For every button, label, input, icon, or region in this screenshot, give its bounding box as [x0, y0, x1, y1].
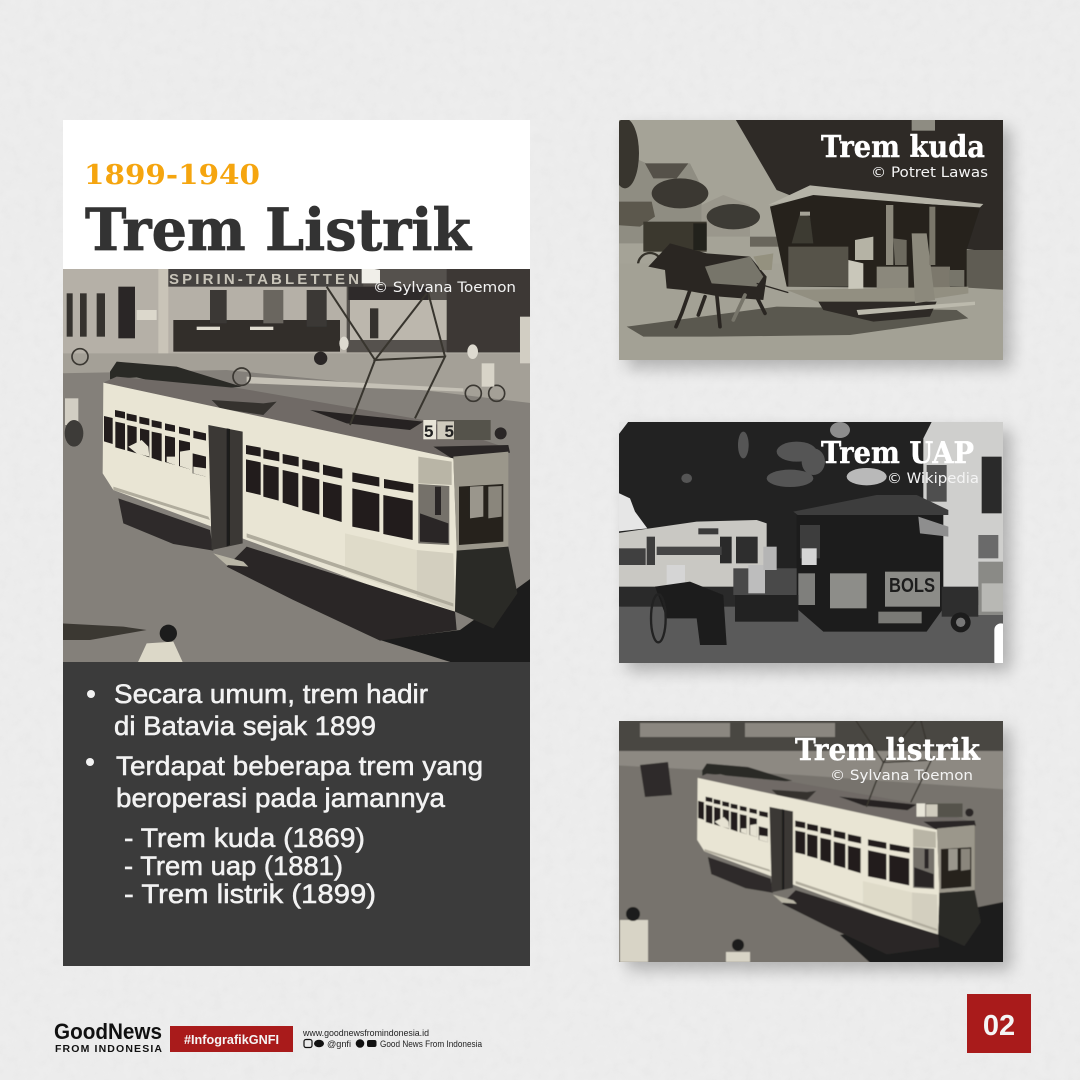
footer links: Good News From Indonesia — [380, 1039, 483, 1050]
caption: Trem kuda: Trem kuda — [821, 130, 985, 165]
icon: youtube — [367, 1040, 376, 1047]
tram type list: - Trem kuda (1869) — [124, 823, 365, 853]
year range: 1899-1940 — [84, 160, 260, 191]
photo card: steam tram — [616, 419, 1011, 671]
credit: © Wikipedia — [887, 471, 979, 487]
credit: © Sylvana Toemon — [830, 768, 973, 784]
route number: 5 5 — [424, 422, 454, 441]
icon: instagram — [304, 1040, 312, 1048]
bullet 1: di Batavia sejak 1899 — [114, 711, 376, 741]
footer logo: GoodNews: FROM INDONESIA — [55, 1043, 162, 1055]
bullet 1: Secara umum, trem hadir — [114, 679, 428, 709]
hashtag badge — [170, 1026, 293, 1052]
footer links: @gnfi — [327, 1039, 351, 1050]
tram type list: - Trem listrik (1899) — [124, 879, 376, 909]
bullet 2: Terdapat beberapa trem yang — [116, 751, 483, 781]
bullet 1 — [87, 679, 428, 741]
main photo: electric tram — [60, 266, 533, 666]
credit: © Potret Lawas — [871, 165, 988, 181]
footer logo: GoodNews — [54, 1019, 162, 1055]
footer logo: GoodNews: GoodNews — [54, 1019, 162, 1044]
photo credit: © Sylvana Toemon — [373, 280, 516, 296]
bullet 2 — [86, 751, 483, 813]
panel: title card — [63, 120, 530, 270]
icon: twitter — [314, 1040, 324, 1047]
tram type list: - Trem uap (1881) — [124, 851, 343, 881]
hashtag badge: #InfografikGNFI — [184, 1032, 279, 1047]
BOLS lettering on tram: BOLS — [889, 575, 935, 597]
page number: 02 — [983, 1010, 1015, 1042]
shop sign lettering: SPIRIN-TABLETTEN — [169, 271, 359, 288]
footer links — [302, 1028, 483, 1050]
photo card: horse tram — [611, 116, 1011, 368]
tram type list — [124, 823, 376, 909]
footer links: www.goodnewsfromindonesia.id — [302, 1028, 429, 1039]
panel: description — [63, 662, 530, 966]
caption: Trem UAP: Trem UAP — [821, 436, 974, 471]
caption: Trem listrik: Trem listrik — [795, 733, 981, 768]
title: Trem Listrik — [85, 196, 473, 264]
photo card: electric tram — [609, 711, 1013, 972]
page number — [967, 994, 1031, 1053]
bullet 2: beroperasi pada jamannya — [116, 783, 446, 813]
icon: facebook — [356, 1039, 364, 1048]
